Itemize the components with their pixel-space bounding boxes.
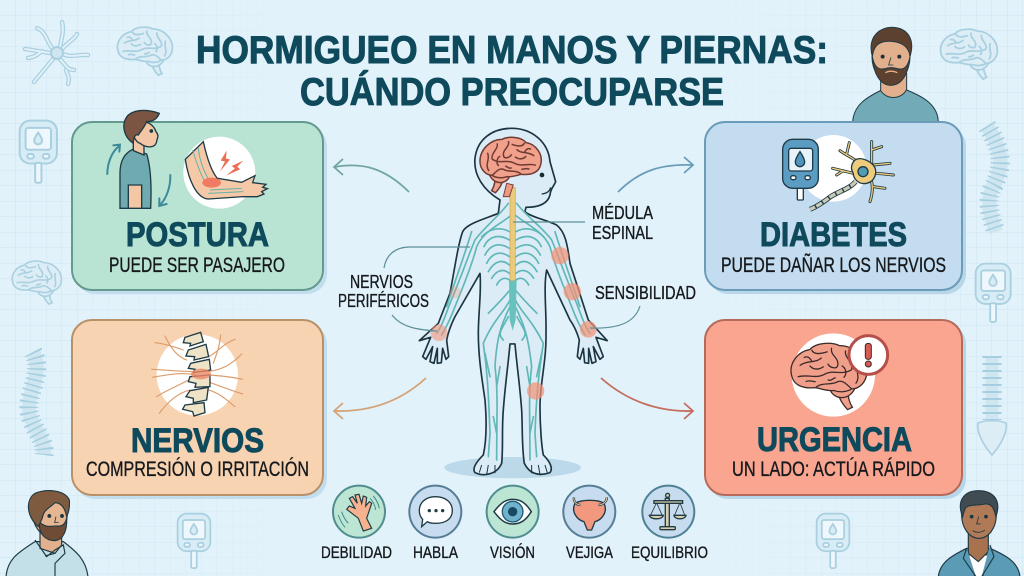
- label: sensibilidad: SENSIBILIDAD: [595, 283, 696, 303]
- arrow: to postura: [334, 159, 409, 192]
- text: postura subtitle: PUEDE SER PASAJERO: [109, 254, 285, 277]
- icon: glucose meter and neuron: [783, 135, 893, 209]
- icon: debilidad: [333, 486, 385, 538]
- icon: background spine and pelvis right: [978, 356, 1006, 455]
- leader: nervios periféricos lower: [392, 315, 437, 331]
- arrow: to nervios: [334, 378, 426, 419]
- leader: médula espinal: [513, 221, 585, 223]
- text: diabetes subtitle: PUEDE DAÑAR LOS NERVIOS: [721, 253, 946, 277]
- arrow: to urgencia: [601, 378, 693, 419]
- icon: background brain top left: [117, 27, 172, 75]
- leader: sensibilidad: [590, 306, 640, 328]
- label: médula espinal: MÉDULA: [592, 203, 653, 223]
- icon: elbow pain: [183, 137, 267, 209]
- label: nervios periféricos: PERIFÉRICOS: [338, 291, 429, 311]
- icon: background meter right: [976, 264, 1011, 322]
- labels: symptoms: HABLA: [413, 543, 459, 562]
- labels: symptoms: [321, 543, 708, 562]
- text: urgencia subtitle: UN LADO: ACTÚA RÁPIDO: [732, 458, 935, 481]
- label: médula espinal: ESPINAL: [592, 223, 653, 243]
- heading: postura: POSTURA: [126, 216, 269, 254]
- icon: vejiga: [563, 486, 615, 538]
- panel: nervios: [72, 320, 327, 499]
- person: bottom left: [6, 491, 88, 576]
- icon: background spine left: [29, 352, 44, 455]
- labels: symptoms: VEJIGA: [566, 543, 614, 562]
- icon: brain with alert: [791, 333, 888, 417]
- panel: diabetes: [705, 122, 966, 294]
- icon: background meter left: [20, 121, 57, 183]
- text: nervios subtitle: COMPRESIÓN O IRRITACIÓN: [86, 458, 309, 481]
- icon: compressed spine nerves: [152, 332, 243, 416]
- labels: symptoms: VISIÓN: [490, 543, 535, 562]
- pain spots: [431, 247, 597, 400]
- leader: nervios periféricos upper: [384, 247, 470, 268]
- icon: background meter bottom left: [178, 514, 210, 568]
- label: nervios periféricos: NERVIOS: [350, 272, 413, 292]
- symptom icons row: [321, 486, 708, 562]
- heading: urgencia: URGENCIA: [757, 421, 912, 459]
- title: HORMIGUEO EN MANOS Y PIERNAS:: [196, 29, 828, 72]
- panel: postura: [72, 110, 327, 294]
- brain: [480, 137, 541, 197]
- icon: background neuron: [25, 22, 88, 84]
- person: top right: [853, 27, 938, 123]
- icon: background brain left: [12, 261, 61, 304]
- body diagram: nervous system: [419, 128, 607, 478]
- label: médula espinal: [592, 203, 653, 243]
- labels: symptoms: DEBILIDAD: [321, 543, 392, 562]
- icon: person with posture arrows: [107, 110, 170, 208]
- labels: symptoms: EQUILIBRIO: [631, 543, 708, 562]
- label: nervios periféricos: [338, 272, 429, 311]
- icon: visión: [487, 486, 539, 538]
- heading: diabetes: DIABETES: [760, 216, 907, 254]
- heading: nervios: NERVIOS: [131, 422, 264, 460]
- icon: equilibrio: [642, 486, 694, 538]
- icon: background spine right: [987, 126, 1000, 232]
- icon: habla: [409, 486, 461, 538]
- panel: urgencia: [705, 320, 966, 499]
- title: [196, 29, 828, 114]
- toes: [479, 465, 547, 475]
- icon: background meter bottom right: [817, 514, 849, 568]
- arrow: to diabetes: [618, 157, 693, 192]
- icon: background brain top right: [941, 29, 997, 79]
- title: CUÁNDO PREOCUPARSE: [300, 70, 724, 114]
- person: bottom right: [938, 491, 1020, 576]
- nerves: [437, 203, 590, 460]
